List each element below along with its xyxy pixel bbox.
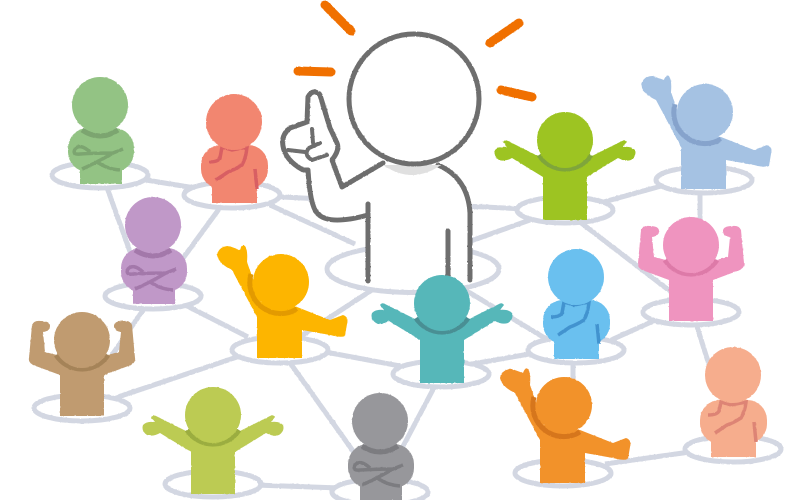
person: gray, arms crossed <box>332 393 428 500</box>
person: teal, arms open <box>372 275 512 387</box>
person: salmon, hand on chest <box>184 94 280 208</box>
person: periwinkle, arm raised <box>641 76 772 193</box>
person: yellow-green, arms open <box>142 387 284 497</box>
ring: central <box>327 246 499 292</box>
orange emphasis rays <box>298 5 532 97</box>
person: orange, arm raised <box>500 368 630 486</box>
person: purple, arms crossed <box>105 197 201 309</box>
person: green, arms crossed <box>52 77 148 188</box>
person: peach, hand on chest <box>685 347 781 462</box>
person: yellow, arm raised <box>217 246 348 363</box>
central person pointing up <box>283 34 499 292</box>
person: sky blue, hand on chest <box>528 249 624 363</box>
person: lime, arms open <box>494 112 636 223</box>
network lines <box>105 179 710 488</box>
person: pink, arms flexed <box>638 217 744 325</box>
person: brown, arms flexed <box>29 312 135 421</box>
